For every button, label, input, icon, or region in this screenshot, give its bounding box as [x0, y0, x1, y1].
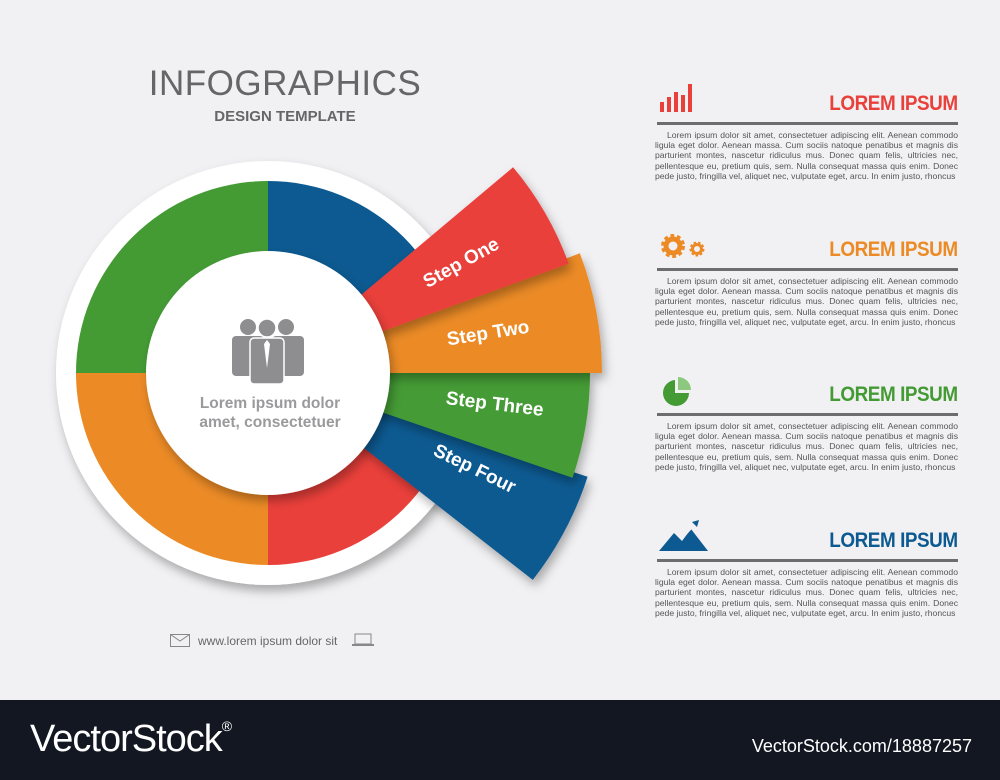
- panel 4: [655, 520, 958, 618]
- footer contact: www.lorem ipsum dolor sit: [198, 634, 337, 648]
- step three wedge: [268, 373, 590, 478]
- icon: bar chart: [660, 84, 692, 112]
- icon: laptop: [352, 634, 374, 646]
- outer white ring: [56, 161, 480, 585]
- icon: envelope: [170, 634, 190, 647]
- step two wedge: [268, 253, 602, 373]
- step four wedge: Step Four: [430, 440, 519, 498]
- step one wedge: [268, 167, 569, 373]
- bottom bar: [0, 700, 1000, 780]
- center circle: [146, 251, 390, 495]
- icon: mountain chart: [659, 520, 708, 551]
- panel 1: [655, 84, 958, 181]
- bottom bar: VectorStock®: [30, 718, 231, 760]
- panel 2: LOREM IPSUM: [830, 238, 958, 261]
- panel 4: Lorem ipsum dolor sit amet, consectetuer adipiscing elit. Aenean commodo ligula eget dolor. Aenean massa. Cum sociis natoque penatibus et magnis dis parturient montes, nascetur ridiculus mus. Donec quam felis, ultricies nec, pellentesque eu, pretium quis, sem. Nulla consequat massa quis enim. Donec pede justo, fringilla vel, aliquet nec, vulputate eget, arcu. In enim justo, rhoncus: [655, 567, 958, 618]
- panel 2: Lorem ipsum dolor sit amet, consectetuer adipiscing elit. Aenean commodo ligula eget dolor. Aenean massa. Cum sociis natoque penatibus et magnis dis parturient montes, nascetur ridiculus mus. Donec quam felis, ultricies nec, pellentesque eu, pretium quis, sem. Nulla consequat massa quis enim. Donec pede justo, fringilla vel, aliquet nec, vulputate eget, arcu. In enim justo, rhoncus: [655, 276, 958, 327]
- wheel chart: [53, 161, 610, 597]
- step three wedge: Step Three: [445, 388, 545, 421]
- step two wedge: Step Two: [445, 317, 531, 350]
- icon: gears: [661, 234, 704, 258]
- icon: people: [232, 319, 304, 384]
- ring quadrants: [76, 181, 460, 565]
- icon: pie chart: [663, 377, 691, 406]
- panel 3: Lorem ipsum dolor sit amet, consectetuer adipiscing elit. Aenean commodo ligula eget dolor. Aenean massa. Cum sociis natoque penatibus et magnis dis parturient montes, nascetur ridiculus mus. Donec quam felis, ultricies nec, pellentesque eu, pretium quis, sem. Nulla consequat massa quis enim. Donec pede justo, fringilla vel, aliquet nec, vulputate eget, arcu. In enim justo, rhoncus: [655, 421, 958, 472]
- panel 3: LOREM IPSUM: [830, 383, 958, 406]
- footer contact: [170, 634, 374, 648]
- subtitle: DESIGN TEMPLATE: [214, 108, 356, 125]
- step one wedge: Step One: [420, 234, 503, 293]
- center text: Lorem ipsum dolor: [200, 395, 340, 412]
- panel 4: LOREM IPSUM: [830, 529, 958, 552]
- panel 1: Lorem ipsum dolor sit amet, consectetuer adipiscing elit. Aenean commodo ligula eget dolor. Aenean massa. Cum sociis natoque penatibus et magnis dis parturient montes, nascetur ridiculus mus. Donec quam felis, ultricies nec, pellentesque eu, pretium quis, sem. Nulla consequat massa quis enim. Donec pede justo, fringilla vel, aliquet nec, vulputate eget, arcu. In enim justo, rhoncus: [655, 130, 958, 181]
- wheel chart: amet, consectetuer: [199, 414, 341, 431]
- bottom bar: VectorStock.com/18887257: [752, 736, 972, 756]
- step four wedge: [268, 373, 588, 580]
- title: INFOGRAPHICS: [149, 64, 421, 103]
- panel 3: [655, 377, 958, 472]
- panel 2: [655, 234, 958, 327]
- panel 1: LOREM IPSUM: [830, 92, 958, 115]
